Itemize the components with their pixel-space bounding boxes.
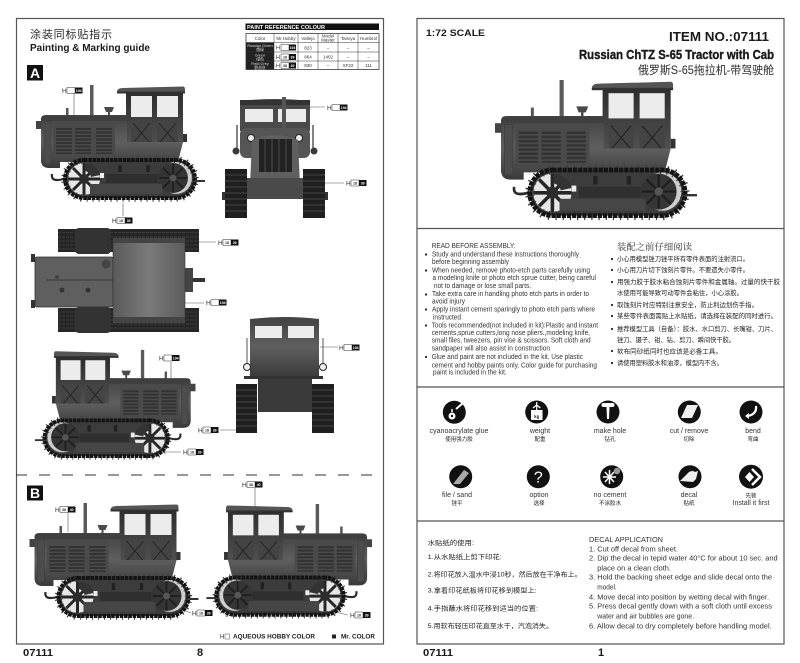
text block: read before assembly chinese: 锉刀、镊子、钳、钻、剪刀、瞬间快干胶。 [617, 335, 735, 344]
text block: decal application english: 1. Cut off decal from sheet. [589, 546, 678, 554]
colour callouts: 194 [220, 301, 226, 305]
paint reference colour table: 绿色 [256, 56, 264, 62]
colour callouts: 18 [357, 614, 361, 618]
text block: decal application english [589, 537, 778, 630]
text block: decal application english: DECAL APPLICATION [589, 537, 663, 544]
colour callouts: 18 [190, 450, 194, 454]
label: make hole: make hole [594, 428, 626, 435]
text block: read before assembly chinese: 用强力胶于胶水粘合蚀刻片零件和金属轴。过量的快干胶 [617, 277, 781, 286]
colour callouts: 194 [341, 106, 347, 110]
scale label: 1:72 SCALE [426, 28, 485, 39]
text block: decal instructions chinese: 2.将印花放入温水中浸10秒，然后放在干净布上。 [428, 570, 582, 578]
tractor: side view B right [206, 504, 372, 615]
paint reference colour table: Vallejo [301, 36, 315, 41]
icon: make hole [596, 400, 620, 424]
paint reference colour table: 40 [291, 64, 294, 68]
colour callouts: H [112, 218, 117, 225]
text block: read before assembly english: Apply instant cement sparingly to photo etch parts where [432, 307, 595, 314]
text block: read before assembly chinese: 水使用可能导致可动零件会粘住，小心涂胶。 [617, 288, 743, 297]
text block: read before assembly chinese: 取蚀刻片时应特别注意安全，防止利边划伤手指。 [617, 300, 758, 309]
colour callouts: 194 [353, 346, 359, 350]
label: option [529, 492, 549, 507]
text block: read before assembly chinese [611, 241, 781, 367]
paint reference colour table: 39 [291, 56, 294, 60]
text block: decal instructions chinese: 水贴纸的使用: [428, 538, 474, 547]
colour callouts: 39 [233, 241, 237, 245]
footer: item number left: 07111 [23, 647, 53, 659]
heading: painting and marking guide: Painting & Marking guide [30, 42, 150, 54]
text block: read before assembly english: instructed [433, 314, 461, 321]
label: no cement: no cement [594, 492, 626, 499]
colour callouts: 18 [205, 428, 209, 432]
label: weight [529, 428, 550, 443]
text block: read before assembly english: paint is included in the kit. [433, 369, 507, 376]
paint reference colour table: XF22 [343, 63, 354, 68]
text block: decal instructions chinese: 4.手指蘸水将印花移到适当的位置: [428, 604, 538, 612]
label: bend [745, 428, 761, 443]
label: install it first: 先装 [745, 492, 757, 500]
label: cut or remove: cut / remove [670, 428, 708, 435]
section badge A [27, 65, 43, 81]
colour callouts: 40 [70, 508, 74, 512]
text block: read before assembly chinese: 小心用刀片切下蚀刻片零件。不要遗失小零件。 [617, 265, 749, 274]
tractor: top view [31, 228, 205, 333]
colour callouts: H [346, 180, 351, 188]
label: option: 选择 [533, 499, 545, 507]
paint reference colour table: H [276, 46, 280, 52]
footer: page number 1: 1 [598, 647, 604, 659]
text block: read before assembly english: a modeling knife or photo etch sprue cutter, being careful [432, 275, 596, 282]
colour callouts: 18 [353, 182, 357, 186]
panel: painting and marking guide [16, 18, 384, 644]
text block: read before assembly chinese: 小心用模型锉刀锉平所有零件表面的注射流口。 [617, 254, 749, 263]
paint reference colour table: Humbrol [360, 36, 377, 41]
paint reference colour table: 823 [304, 46, 312, 50]
icon: file or sand [449, 465, 472, 488]
tractor: side view A left [36, 85, 205, 198]
colour callouts: H [242, 482, 247, 489]
icon: decal [678, 465, 702, 488]
label: no cement [594, 492, 626, 507]
legend: AQUEOUS HOBBY COLOR [233, 634, 316, 640]
paint reference colour table: 194 [290, 46, 295, 50]
icon: cut or remove [678, 400, 701, 424]
chinese product title: 俄罗斯S-65拖拉机-带驾驶舱 [638, 63, 774, 77]
paint reference colour table: Green [255, 54, 265, 58]
paint reference colour table: – [327, 46, 330, 50]
colour callouts: H [62, 88, 67, 95]
icon: option [527, 465, 550, 488]
legend [220, 634, 376, 640]
tractor: front view [222, 97, 328, 218]
label: cut or remove [670, 428, 708, 443]
text block: read before assembly chinese: 推荐模型工具（自备）：胶水、水口剪刀、长嘴钳、刀片、 [617, 324, 777, 333]
paint reference colour table: 830 [304, 63, 312, 68]
label: make hole: 钻孔 [604, 435, 616, 443]
section badge B: B [30, 485, 40, 501]
paint reference colour table: – [327, 63, 330, 68]
colour callouts: 18 [225, 241, 229, 245]
label: weight: 配重 [534, 435, 546, 443]
colour callouts: 39 [198, 450, 202, 454]
heading: chinese painting guide: 涂装同标贴指示 [30, 27, 112, 41]
colour callouts: 39 [213, 428, 217, 432]
text block: read before assembly chinese: 软布同砂纸同时也应该是必备工具。 [617, 346, 722, 355]
colour callouts: 18 [199, 612, 203, 616]
text block: read before assembly english: Glue and paint are not included in the kit. Use plastic [432, 354, 583, 361]
label: bend: bend [745, 428, 761, 435]
label: cut or remove: 切除 [683, 435, 695, 443]
paint reference colour table: H [276, 55, 280, 61]
label: bend: 弯曲 [747, 435, 759, 443]
paint reference colour table: 111 [365, 63, 372, 68]
colour callouts: H [198, 428, 203, 434]
text block: read before assembly english: Study and understand these instructions thoroughly [432, 252, 579, 258]
icon: cyanoacrylate glue [443, 401, 466, 424]
footer: item number right: 07111 [423, 647, 453, 659]
paint reference colour table: 1402 [323, 54, 334, 60]
paint reference colour table: Model [322, 34, 334, 38]
text block: decal application english: 6. Allow decal to dry completely before handling model. [589, 624, 772, 630]
colour callouts: 18 [119, 219, 123, 223]
text block: read before assembly english: Take extra care in handling photo etch parts in order to [432, 291, 589, 298]
item number: ITEM NO.:07111 [669, 29, 769, 44]
text block: read before assembly english: not to damage or lose small parts. [434, 283, 531, 290]
text block: decal instructions chinese: 3.拿着印花纸板将印花移到模型上: [428, 586, 537, 594]
label: decal: 贴纸 [683, 499, 695, 507]
text block: decal application english: model. [597, 584, 617, 592]
text block: decal instructions chinese: 1.从水贴纸上剪下印花: [428, 552, 502, 561]
colour callouts: 194 [173, 356, 179, 360]
colour callouts: 39 [361, 182, 365, 186]
colour callouts: 39 [127, 219, 131, 223]
colour callouts: 38 [249, 483, 253, 487]
paint reference colour table: 18 [283, 56, 287, 60]
tractor: side view A rear facing [35, 350, 196, 456]
icon: weight: kg [534, 414, 540, 419]
text block: decal application english: 4. Move decal into position by wetting decal with finger. [589, 594, 769, 602]
label: cyanoacrylate glue: 使用强力胶 [445, 435, 473, 443]
text block: read before assembly chinese: 请使用塑料胶水和油漆，模型内不含。 [617, 358, 723, 367]
text block: read before assembly english: before beginning assembly [432, 259, 509, 266]
label: make hole [594, 428, 626, 443]
tractor: rear view [236, 317, 334, 433]
text block: decal instructions chinese: 5.用软布轻压印花直至水干，汽泡消失。 [428, 621, 553, 630]
paint reference colour table [246, 24, 379, 70]
text block: read before assembly english [425, 243, 598, 376]
section badge A: A [30, 65, 40, 81]
colour callouts: H [192, 610, 197, 618]
text block: read before assembly chinese: 装配之前仔细阅读 [617, 241, 693, 253]
text block: read before assembly english: avoid injury [432, 299, 465, 306]
text block: read before assembly english: small files, tweezers, pin vise & scissors. Soft cloth and [432, 338, 591, 345]
text block: decal application english: 2. Dip the decal in tepid water 40°C for about 10 sec. and [589, 554, 778, 562]
paint reference colour table: PAINT REFERENCE COLOUR [247, 25, 325, 31]
paint reference colour table: – [367, 54, 370, 60]
label: install it first: Install it first [733, 500, 770, 507]
product title: Russian ChTZ S-65 Tractor with Cab [579, 47, 774, 62]
paint reference colour table: 864 [304, 54, 312, 60]
text block: read before assembly english: READ BEFORE ASSEMBLY: [432, 243, 516, 250]
paint reference colour table: Russian Green [247, 44, 273, 48]
text block: decal application english: 3. Hold the backing sheet edge and slide decal onto the [589, 574, 772, 582]
label: decal: decal [681, 492, 698, 499]
icon: bend [740, 400, 762, 424]
label: weight: weight [529, 428, 550, 435]
panel: instruction sheet [417, 18, 784, 644]
colour callouts: H [183, 450, 188, 456]
text block: read before assembly english: cement and hobby paints only. Color guide for purchasing [432, 362, 597, 369]
icon: no cement [600, 465, 623, 488]
label: install it first [733, 492, 770, 507]
paint reference colour table: H [276, 64, 280, 70]
paint reference colour table: – [347, 46, 350, 50]
paint reference colour table: Color [255, 36, 266, 41]
icon: install it first [739, 465, 763, 489]
paint reference colour table: Master [321, 38, 335, 42]
label: decal [681, 492, 698, 507]
colour callouts: 40 [257, 483, 261, 487]
section badge B [27, 485, 43, 501]
paint reference colour table: – [347, 54, 350, 60]
colour callouts: 39 [365, 614, 369, 618]
label: file or sand [442, 492, 472, 507]
text block: read before assembly chinese: 某些零件表面需贴上水贴纸，请选择在装配的同时进行。 [617, 311, 777, 320]
label: no cement: 不涂胶水 [599, 499, 621, 507]
tractor: main side view [495, 80, 697, 216]
leader lines [68, 93, 348, 615]
text block: decal application english: place on a clean cloth. [597, 566, 671, 572]
text block: read before assembly english: Tools recommended(not included in kit):Plastic and instant [432, 323, 598, 330]
label: file or sand: 锉平 [451, 499, 463, 507]
text block: decal application english: water and air bubbles are gone. [596, 614, 694, 620]
paint reference colour table: Field Grey [251, 62, 269, 66]
colour callouts: 38 [62, 508, 66, 512]
icon: weight [525, 400, 548, 424]
label: cyanoacrylate glue [430, 428, 489, 443]
paint reference colour table: 野战灰 [254, 65, 266, 70]
footer: page number 8: 8 [197, 647, 203, 659]
icon: option: ? [534, 470, 543, 486]
label: file or sand: file / sand [442, 492, 472, 499]
label: cyanoacrylate glue: cyanoacrylate glue [430, 428, 489, 435]
colour callouts: H [55, 507, 60, 514]
legend: Mr. COLOR [341, 634, 376, 640]
text block: read before assembly english: When needed, remove photo-etch parts carefully using [432, 268, 590, 274]
tractor: side view B left [30, 503, 198, 616]
text block: read before assembly english: cements,sprue cutters,long nose pliers.,modeling knife, [432, 330, 590, 337]
colour callouts: H [339, 345, 344, 352]
paint reference colour table: Mr.Hobby [276, 36, 296, 41]
paint reference colour table: 38 [283, 64, 287, 68]
colour callouts: H [350, 612, 355, 620]
legend: H [220, 634, 224, 640]
colour callouts: H [327, 105, 332, 112]
colour callouts: H [206, 300, 211, 307]
text block: decal instructions chinese [428, 538, 582, 630]
colour callouts: H [218, 240, 223, 247]
colour callouts: H [159, 356, 164, 362]
colour callouts: 194 [76, 89, 82, 93]
colour callouts [55, 88, 370, 620]
paint reference colour table: Tamiya [341, 36, 356, 41]
colour callouts: 39 [207, 612, 211, 616]
paint reference colour table: – [367, 46, 370, 50]
text block: read before assembly english: sandpaper will also assist in construction [432, 346, 550, 353]
text block: decal application english: 5. Press decal gently down with a soft cloth until excess [589, 604, 773, 610]
label: option: option [529, 492, 549, 499]
paint reference colour table: 俄绿 [256, 47, 264, 52]
